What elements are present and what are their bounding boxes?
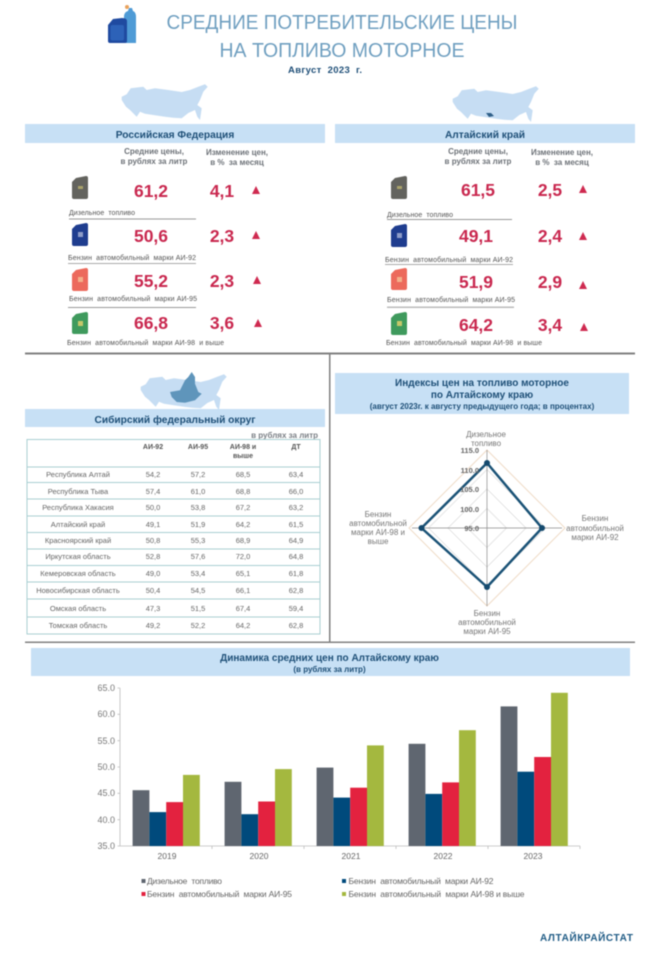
row: AI-98 bbox=[386, 315, 588, 347]
table: 62,8 bbox=[289, 586, 303, 595]
table: 49,2 bbox=[146, 621, 160, 630]
row: AI-92: Бензин автомобильный марки АИ-92 bbox=[68, 254, 196, 262]
heading bbox=[25, 409, 325, 427]
icon: AI-92 canister bbox=[72, 223, 88, 246]
legend: Бензин автомобильный марки АИ-98 и выше bbox=[348, 889, 525, 899]
row: AI-95: 2,9 bbox=[538, 272, 562, 292]
panel: Russian Federation bbox=[25, 124, 325, 347]
panel: Altai Krai bbox=[335, 124, 635, 347]
table: Омская область bbox=[50, 604, 106, 613]
table: Красноярский край bbox=[45, 536, 111, 545]
table: Алтайский край bbox=[51, 520, 105, 529]
table: 51,5 bbox=[191, 604, 205, 613]
table: 51,9 bbox=[191, 520, 205, 529]
icon: diesel canister bbox=[72, 176, 88, 199]
table: 57,2 bbox=[191, 470, 205, 479]
table: 66,0 bbox=[289, 487, 303, 496]
table: 68,5 bbox=[236, 470, 250, 479]
table: 66,1 bbox=[236, 586, 250, 595]
row: diesel: 2,5 bbox=[538, 180, 562, 200]
row: AI-98: Бензин автомобильный марки АИ-98 и выше bbox=[67, 339, 224, 347]
heading bbox=[31, 648, 630, 676]
legend: Бензин автомобильный марки АИ-95 bbox=[147, 889, 292, 899]
table: 63,2 bbox=[289, 503, 303, 512]
icon: AI-95 canister bbox=[72, 268, 88, 291]
bar chart: 2022 bbox=[434, 851, 453, 861]
radar chart: топливо bbox=[471, 439, 502, 448]
radar chart: марки АИ-92 bbox=[571, 533, 619, 542]
table: Кемеровская область bbox=[40, 569, 116, 578]
radar chart: автомобильной bbox=[458, 618, 516, 627]
table: Республика Хакасия bbox=[42, 503, 114, 512]
radar chart: автомобильной bbox=[566, 524, 624, 533]
table: 50,4 bbox=[146, 586, 160, 595]
radar chart: Бензин bbox=[365, 510, 391, 519]
table: 49,0 bbox=[146, 569, 160, 578]
table: 67,4 bbox=[236, 604, 250, 613]
bar chart: 45.0 bbox=[97, 788, 115, 798]
panel: Siberian Federal District table bbox=[25, 409, 325, 634]
legend bbox=[142, 876, 525, 899]
row: AI-95 bbox=[387, 272, 587, 304]
bar chart: 2023 bbox=[524, 851, 543, 861]
radar chart: марки АИ-98 и bbox=[351, 528, 405, 537]
panel: price dynamics bbox=[31, 648, 630, 899]
table: 68,8 bbox=[236, 487, 250, 496]
row: AI-92: 49,1 bbox=[459, 226, 493, 246]
table: 57,6 bbox=[191, 552, 205, 561]
row: AI-92 bbox=[68, 226, 260, 262]
table bbox=[27, 440, 320, 634]
table: 68,9 bbox=[236, 536, 250, 545]
column headers: Изменение цен, bbox=[206, 148, 268, 157]
bar chart bbox=[97, 683, 580, 861]
table: 53,4 bbox=[191, 569, 205, 578]
table: 64,9 bbox=[289, 536, 303, 545]
row: AI-98: Бензин автомобильный марки АИ-98 и выше bbox=[386, 339, 542, 347]
row: diesel: Дизельное топливо bbox=[69, 210, 135, 217]
row: AI-98: 64,2 bbox=[459, 315, 493, 335]
table: 53,8 bbox=[191, 503, 205, 512]
table: 55,3 bbox=[191, 536, 205, 545]
column headers bbox=[445, 147, 593, 167]
row: AI-98 bbox=[67, 313, 262, 347]
title: СРЕДНИЕ ПОТРЕБИТЕЛЬСКИЕ ЦЕНЫ bbox=[166, 12, 518, 34]
heading bbox=[335, 373, 629, 414]
table: 52,2 bbox=[191, 621, 205, 630]
row: AI-92: 50,6 bbox=[134, 226, 168, 246]
table: 64,2 bbox=[236, 520, 250, 529]
table: 50,8 bbox=[146, 536, 160, 545]
heading bbox=[335, 124, 635, 143]
table: 72,0 bbox=[236, 552, 250, 561]
table: АИ-98 и bbox=[230, 444, 256, 451]
row: AI-95: Бензин автомобильный марки АИ-95 bbox=[387, 296, 515, 304]
table: 61,8 bbox=[289, 569, 303, 578]
table: Томская область bbox=[49, 621, 107, 630]
table: выше bbox=[233, 453, 253, 460]
heading: Сибирский федеральный округ bbox=[94, 414, 256, 426]
panel: price indices radar bbox=[335, 373, 629, 636]
column headers: в рублях за литр bbox=[121, 157, 188, 166]
radar chart: марки АИ-95 bbox=[463, 627, 511, 636]
radar chart: Дизельное bbox=[466, 430, 506, 439]
icon: AI-95 canister bbox=[391, 268, 407, 290]
table: 57,4 bbox=[146, 487, 160, 496]
table: 52,8 bbox=[146, 552, 160, 561]
row: diesel: 4,1 bbox=[210, 181, 234, 201]
radar chart: Бензин bbox=[474, 609, 500, 618]
row: AI-95: 2,3 bbox=[210, 271, 234, 291]
icon: fuel canister and bottle bbox=[108, 5, 136, 43]
map: Siberian Federal District bbox=[141, 372, 227, 410]
row: diesel: Дизельное топливо bbox=[387, 212, 453, 219]
row: AI-98: 66,8 bbox=[134, 313, 168, 333]
row: AI-98: 3,6 bbox=[210, 313, 234, 333]
radar chart: 105.0 bbox=[460, 485, 479, 494]
radar chart: 115.0 bbox=[461, 446, 479, 455]
icon: AI-98 canister bbox=[72, 312, 88, 334]
table: Иркутская область bbox=[45, 552, 111, 561]
row: diesel bbox=[387, 180, 587, 219]
heading: (в рублях за литр) bbox=[293, 665, 366, 674]
table: 59,4 bbox=[289, 604, 303, 613]
row: AI-95 bbox=[69, 271, 261, 303]
bar chart: 2020 bbox=[250, 851, 269, 861]
column headers bbox=[121, 147, 268, 167]
row: diesel: 61,5 bbox=[461, 180, 495, 200]
table: 67,2 bbox=[236, 503, 250, 512]
table: 54,5 bbox=[191, 586, 205, 595]
bar chart: 2019 bbox=[158, 851, 177, 861]
radar chart bbox=[349, 430, 624, 636]
table: Республика Тыва bbox=[48, 487, 109, 496]
bar chart: 50.0 bbox=[97, 762, 115, 772]
bar chart: 2021 bbox=[342, 851, 361, 861]
legend: Бензин автомобильный марки АИ-92 bbox=[348, 876, 494, 886]
row: AI-98: 3,4 bbox=[538, 315, 562, 335]
column headers: в % за месяц bbox=[210, 158, 264, 167]
icon: AI-98 canister bbox=[391, 312, 407, 335]
row: AI-92 bbox=[385, 226, 587, 264]
table: 54,2 bbox=[146, 470, 160, 479]
row: AI-92: 2,3 bbox=[210, 226, 234, 246]
radar chart: Бензин bbox=[582, 514, 608, 523]
row: AI-95: Бензин автомобильный марки АИ-95 bbox=[69, 295, 197, 303]
radar chart: автомобильной bbox=[349, 519, 407, 528]
radar chart: 95.0 bbox=[464, 524, 479, 533]
bar chart: 40.0 bbox=[97, 815, 115, 825]
table: 47,3 bbox=[146, 604, 160, 613]
legend: Дизельное топливо bbox=[147, 876, 222, 886]
radar chart: выше bbox=[368, 537, 389, 546]
heading: Индексы цен на топливо моторное bbox=[395, 378, 569, 389]
row: diesel: 61,2 bbox=[134, 181, 168, 201]
bar chart: 60.0 bbox=[97, 709, 115, 719]
title bbox=[166, 12, 518, 62]
heading: (август 2023г. к августу предыдущего года; в процентах) bbox=[370, 402, 595, 411]
icon: AI-92 canister bbox=[391, 224, 407, 247]
table: 61,5 bbox=[289, 520, 303, 529]
table: 64,2 bbox=[236, 621, 250, 630]
table: Новосибирская область bbox=[36, 586, 120, 595]
table: 63,4 bbox=[289, 470, 303, 479]
row: AI-95: 55,2 bbox=[134, 271, 168, 291]
radar chart: 100.0 bbox=[460, 505, 479, 514]
table: 49,1 bbox=[146, 520, 160, 529]
heading: Динамика средних цен по Алтайскому краю bbox=[220, 653, 439, 664]
table: АИ-92 bbox=[143, 444, 163, 451]
column headers: Средние цены, bbox=[124, 147, 184, 156]
source: Altaikraistat: АЛТАЙКРАЙСТАТ bbox=[540, 931, 633, 944]
bar chart: 55.0 bbox=[97, 736, 115, 746]
table: Республика Алтай bbox=[46, 470, 110, 479]
table: 65,1 bbox=[236, 569, 250, 578]
column headers: в рублях за литр bbox=[445, 157, 512, 166]
radar chart: 110.0 bbox=[461, 466, 479, 475]
row: diesel bbox=[69, 181, 260, 217]
heading: по Алтайскому краю bbox=[431, 390, 534, 401]
table: АИ-95 bbox=[188, 444, 208, 451]
unit note: в рублях за литр bbox=[251, 431, 318, 440]
date: Август 2023 г. bbox=[288, 65, 362, 76]
column headers: в % за месяц bbox=[535, 158, 589, 167]
table: 62,8 bbox=[289, 621, 303, 630]
bar chart: 35.0 bbox=[97, 841, 115, 851]
map: Russia with Altai Krai highlighted bbox=[453, 86, 539, 122]
title: НА ТОПЛИВО МОТОРНОЕ bbox=[220, 40, 464, 62]
map: Russia bbox=[122, 84, 208, 120]
table: 61,0 bbox=[191, 487, 205, 496]
heading: Алтайский край bbox=[445, 130, 525, 141]
row: AI-92: Бензин автомобильный марки АИ-92 bbox=[385, 256, 513, 264]
table: ДТ bbox=[291, 444, 301, 451]
bar chart: 65.0 bbox=[97, 683, 115, 693]
icon: diesel canister bbox=[391, 176, 407, 199]
row: AI-92: 2,4 bbox=[538, 226, 562, 246]
table: 50,0 bbox=[146, 503, 160, 512]
column headers: Средние цены, bbox=[448, 147, 508, 156]
table: 64,8 bbox=[289, 552, 303, 561]
heading: Российская Федерация bbox=[116, 130, 234, 141]
row: AI-95: 51,9 bbox=[459, 272, 493, 292]
column headers: Изменение цен, bbox=[531, 148, 593, 157]
heading bbox=[25, 124, 325, 143]
